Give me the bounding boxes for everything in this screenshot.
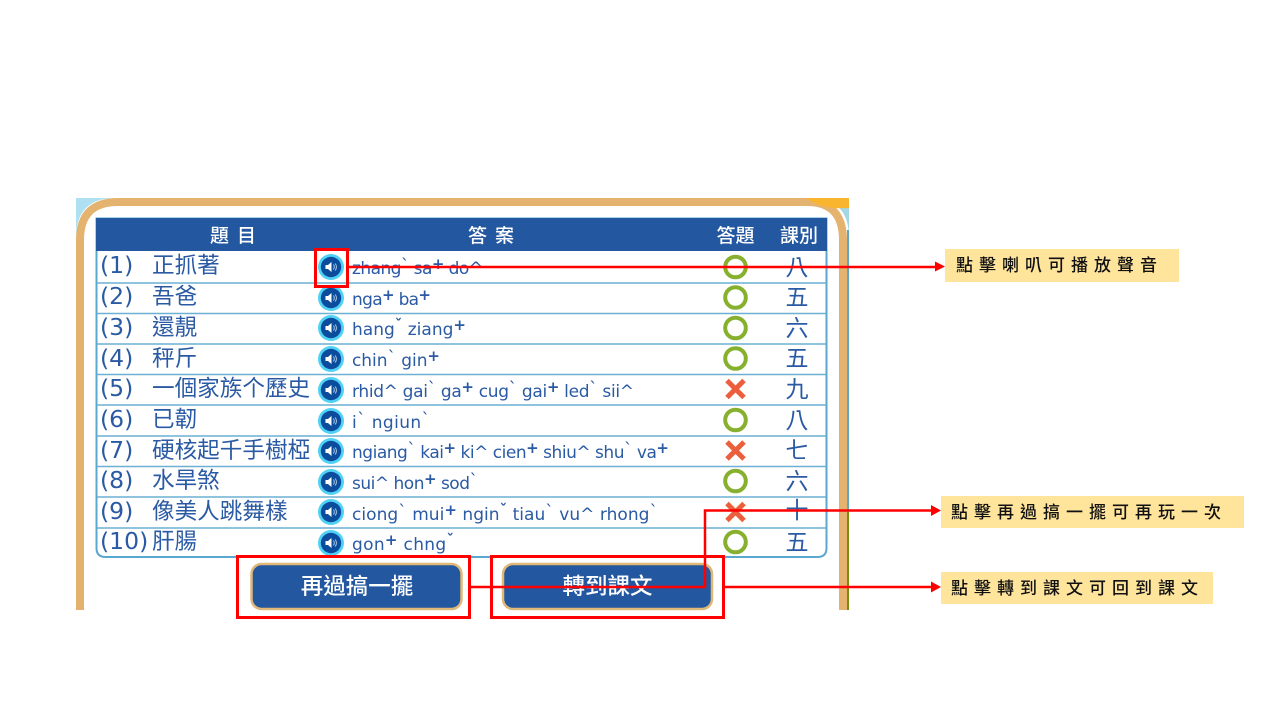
row 7: 硬核起千手樹椏 <box>152 432 310 465</box>
row 5: ` <box>589 379 598 399</box>
row 6: 八 <box>786 401 808 435</box>
row 5: + <box>461 378 474 396</box>
row 9: + <box>444 501 457 519</box>
row 10: (10) <box>100 527 148 555</box>
row 8: 六 <box>786 462 808 496</box>
row 5: gai <box>517 382 547 402</box>
row 8 <box>100 462 808 496</box>
row 10: ˇ <box>446 531 454 549</box>
row 4: 五 <box>786 339 808 373</box>
row 8: (8) <box>100 466 133 494</box>
row 8: 水旱煞 <box>152 462 220 495</box>
row 9: ` <box>650 502 658 522</box>
row 4 <box>100 339 808 373</box>
row 9: ˇ <box>500 501 507 519</box>
header row: 課別 <box>780 221 818 248</box>
row 5: ga <box>436 382 462 402</box>
yellow corner decoration <box>806 198 849 208</box>
row 7: 七 <box>786 431 808 465</box>
row 9: tiau <box>507 505 545 525</box>
row 5: 九 <box>786 370 808 404</box>
row 6 <box>100 401 808 435</box>
row 3: 六 <box>786 309 808 343</box>
row 5: sii^ <box>597 382 634 402</box>
row 9 <box>100 491 808 526</box>
row 7: + <box>526 439 539 457</box>
highlight box: replay button <box>238 556 470 618</box>
arrow: speaker to note <box>349 262 945 272</box>
note: speaker <box>945 249 1179 282</box>
button: replay: 再過搞一擺 <box>301 569 413 601</box>
row 2: ba <box>394 290 419 310</box>
note: speaker: 點擊喇叭可播放聲音 <box>956 251 1163 276</box>
row 1: zhang <box>352 259 401 279</box>
row 1 <box>100 247 808 282</box>
row 3: (3) <box>100 313 133 341</box>
row 9: 像美人跳舞樣 <box>152 493 288 526</box>
row 7: ngiang <box>352 443 408 463</box>
row 9: (9) <box>100 497 133 525</box>
header row <box>210 221 818 248</box>
header row: 答案 <box>468 221 522 248</box>
row 4: 秤斤 <box>152 340 197 373</box>
row 10: 肝腸 <box>152 523 197 556</box>
header row: 題目 <box>210 221 264 248</box>
row 5: (5) <box>100 374 133 402</box>
row 1: (1) <box>100 251 133 279</box>
button: replay <box>252 564 462 609</box>
row 9: ciong <box>352 505 398 525</box>
row 5 <box>100 370 808 404</box>
row 3: + <box>453 316 466 334</box>
row 2: 吾爸 <box>152 278 197 311</box>
row 8: sod <box>436 474 470 494</box>
arrow: lesson button to note <box>725 582 941 592</box>
row 2 <box>100 278 808 312</box>
row 6: 已韌 <box>152 401 197 434</box>
row 10: 五 <box>786 523 808 557</box>
game screenshot panel <box>76 198 849 610</box>
row 4: gin <box>396 351 427 371</box>
button: go to lesson: 轉到課文 <box>562 569 653 601</box>
results table <box>96 218 827 557</box>
row 2: 五 <box>786 278 808 312</box>
row 4: chin <box>352 351 388 371</box>
row 9: 十 <box>786 491 808 525</box>
row 9: vu^ rhong <box>554 505 649 525</box>
row 7: (7) <box>100 436 133 464</box>
row 5: + <box>547 378 559 396</box>
row 10 <box>100 523 808 557</box>
row 3: 還靚 <box>152 309 197 342</box>
row 9: ngin <box>457 505 500 525</box>
row 5: 一個家族个歷史 <box>152 370 310 403</box>
row 4: (4) <box>100 344 133 372</box>
row 7: + <box>656 439 669 457</box>
row 1: 八 <box>786 248 808 282</box>
row 5: led <box>559 382 590 402</box>
row 10: gon <box>352 535 385 555</box>
row 10: + <box>385 531 398 549</box>
row 1: 正抓著 <box>152 247 220 280</box>
row 1: ` <box>401 256 409 276</box>
row 8: sui^ hon <box>352 474 424 494</box>
row 6: ngiun <box>366 413 421 433</box>
row 3: ˇ <box>395 316 402 334</box>
row 6: i <box>352 413 357 433</box>
row 8: ` <box>470 471 478 491</box>
row 7: + <box>444 439 456 457</box>
row 1: sa <box>409 259 432 279</box>
row 9: ` <box>545 502 554 522</box>
row 7: ` <box>407 440 416 460</box>
row 7: ki^ cien <box>456 443 527 463</box>
row 5: ` <box>428 379 436 399</box>
note: go to lesson: 點擊轉到課文可回到課文 <box>951 574 1204 599</box>
highlight box: speaker <box>316 250 348 286</box>
row 4: ` <box>387 348 396 368</box>
row 9: ` <box>398 502 407 522</box>
row 7: kai <box>415 443 444 463</box>
arrow: replay button to note <box>470 505 941 587</box>
row 3: ziang <box>402 320 453 340</box>
highlight box: lesson button <box>492 556 724 618</box>
tan frame <box>80 202 843 610</box>
row 6: ` <box>357 410 366 430</box>
row 1: + <box>432 255 444 273</box>
row 7: va <box>632 443 657 463</box>
row 8: + <box>424 470 437 488</box>
row 7: shiu^ shu <box>538 443 624 463</box>
row 6: (6) <box>100 405 133 433</box>
row 5: ` <box>509 379 517 399</box>
row 6: ` <box>422 410 430 430</box>
row 4: + <box>427 347 440 365</box>
row 1: do^ <box>444 259 483 279</box>
row 7: ` <box>624 440 632 460</box>
note: replay: 點擊再過搞一擺可再玩一次 <box>951 498 1227 523</box>
row 2: (2) <box>100 282 133 310</box>
button: go to lesson <box>503 564 712 609</box>
row 9: mui <box>407 505 444 525</box>
header row: 答題 <box>716 221 755 248</box>
row 5: rhid^ gai <box>352 382 428 402</box>
row 2: nga <box>352 290 383 310</box>
row 3: hang <box>352 320 395 340</box>
row 7 <box>100 431 808 465</box>
row 5: cug <box>474 382 509 402</box>
row 3 <box>100 309 808 343</box>
row 10: chng <box>398 535 446 555</box>
row 2: + <box>418 286 431 304</box>
row 2: + <box>382 286 395 304</box>
